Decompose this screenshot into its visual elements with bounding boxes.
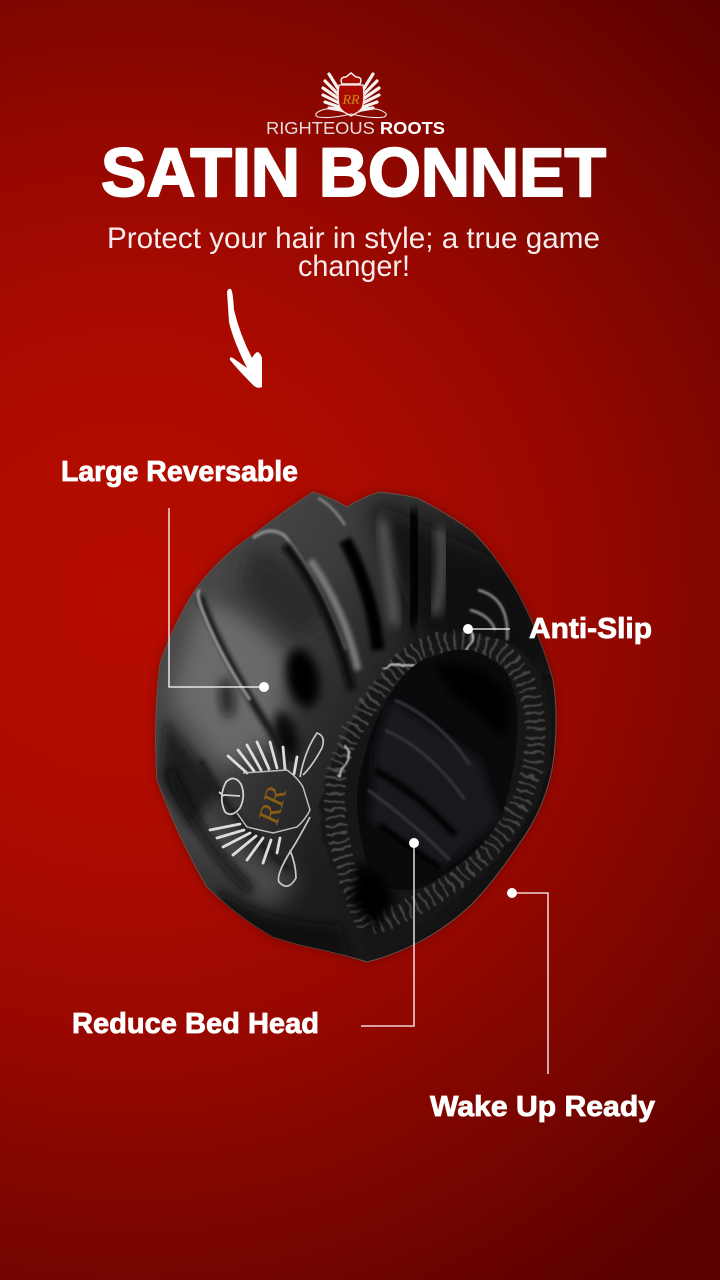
bonnet interior [357,650,517,890]
marker dot [259,682,269,692]
logo wings [323,74,379,110]
logo shield [338,85,364,116]
embroidered monogram: RR [252,784,293,829]
leader line [169,508,264,687]
leader line [468,628,510,630]
satin folds and sheen [160,498,560,960]
leader line [512,893,548,1074]
satin bonnet [156,492,560,962]
bonnet silhouette [156,492,556,962]
title: SATIN BONNET [101,134,606,211]
label: Wake Up Ready [430,1091,655,1123]
callout: Large Reversable [61,456,298,692]
embroidered crown [219,778,243,814]
label: Large Reversable [61,456,298,488]
brand logo [266,73,445,138]
subtitle: changer! [298,250,410,283]
brand name: RIGHTEOUS ROOTS [266,118,445,138]
callout: Anti-Slip [463,613,652,645]
embroidered shield [237,770,310,833]
logo crown [341,73,361,84]
label: Anti-Slip [529,613,652,645]
arrow pointing down [227,289,262,388]
leader line [361,843,414,1026]
subtitle [107,222,600,283]
logo monogram: RR [341,93,360,108]
marker dot [463,624,473,634]
bonnet soft shadow [156,492,556,962]
callout: Reduce Bed Head [72,838,419,1040]
subtitle: Protect your hair in style; a true game [107,222,600,255]
embroidered wings [210,742,297,863]
embroidered ribbon [278,733,323,886]
marker dot [507,888,517,898]
embroidered bonnet logo [210,733,323,886]
logo ribbon loops [316,109,386,118]
label: Reduce Bed Head [72,1008,319,1040]
callout: Wake Up Ready [430,888,655,1123]
elastic band [320,630,553,950]
marker dot [409,838,419,848]
